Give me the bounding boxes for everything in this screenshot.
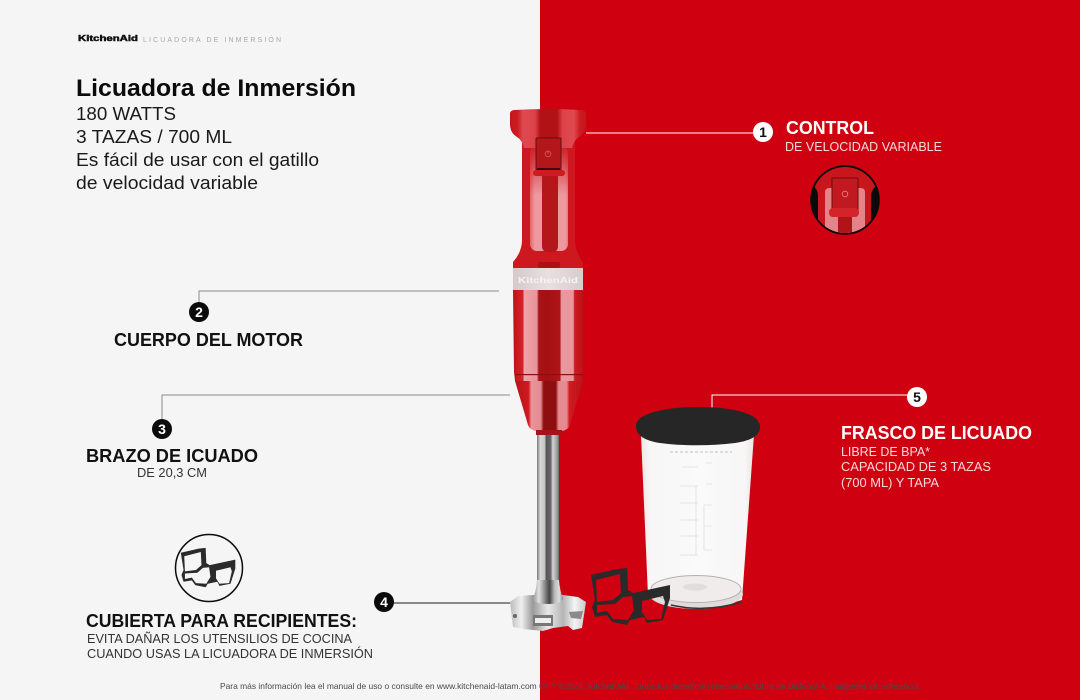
product specifications: de velocidad variable xyxy=(76,173,258,193)
product specifications: Es fácil de usar con el gatillo xyxy=(76,150,319,170)
callout 5: blending jar: LIBRE DE BPA* xyxy=(841,444,930,459)
blender: blade foot xyxy=(510,595,586,631)
blender: trigger bar xyxy=(533,170,565,176)
callout 1: control: 1 xyxy=(759,124,767,140)
callout 4: pan guard: 4 xyxy=(380,594,388,610)
blender: collar xyxy=(536,430,562,435)
callout 5: blending jar: FRASCO DE LICUADO xyxy=(841,423,1032,443)
brand header: KitchenAid xyxy=(78,34,138,43)
callout 1: control: DE VELOCIDAD VARIABLE xyxy=(785,139,942,154)
blender: ring xyxy=(515,374,583,375)
jar: base xyxy=(649,576,743,609)
blender: steel neck flare xyxy=(533,580,563,604)
product specifications: 180 WATTS xyxy=(76,104,176,124)
brand header: LICUADORA DE INMERSIÓN xyxy=(143,35,281,44)
callout 2: motor body: CUERPO DEL MOTOR xyxy=(114,330,303,350)
blender: steel shaft xyxy=(537,432,559,587)
callout 3: blending arm xyxy=(86,395,510,480)
title: Licuadora de Inmersión xyxy=(76,75,356,102)
blender: highlight fade xyxy=(530,146,568,196)
jar: lid xyxy=(636,407,760,445)
product specifications: 3 TAZAS / 700 ML xyxy=(76,127,232,147)
callout 4: pan guard: CUBIERTA PARA RECIPIENTES: xyxy=(86,611,357,631)
immersion blender xyxy=(510,109,586,631)
icon: trigger close-up inset xyxy=(810,166,880,237)
icon: pan guard inset xyxy=(176,534,242,602)
callout 5: blending jar: 5 xyxy=(913,389,921,405)
blender: neck highlight xyxy=(530,146,568,251)
callout 4: pan guard: CUANDO USAS LA LICUADORA DE INMERSIÓN xyxy=(87,646,373,661)
brand header xyxy=(78,34,281,44)
blender: silver band xyxy=(513,268,583,290)
callout 3: blending arm: BRAZO DE ICUADO xyxy=(86,446,258,466)
blender: center stripe xyxy=(542,174,558,252)
callout 1: control: CONTROL xyxy=(786,118,874,138)
callout 3: blending arm: 3 xyxy=(158,421,166,437)
pan guard accessory xyxy=(591,568,670,625)
background: light left panel xyxy=(0,0,540,700)
jar: body xyxy=(641,435,754,606)
callout 5: blending jar: CAPACIDAD DE 3 TAZAS xyxy=(841,459,991,474)
callout 4: pan guard xyxy=(86,592,510,661)
background: red right panel xyxy=(540,0,1080,700)
callout 3: blending arm: DE 20,3 CM xyxy=(137,465,207,480)
blender: handle neck xyxy=(513,135,583,268)
blender: cone xyxy=(515,381,583,431)
product specifications xyxy=(76,104,319,193)
callout 2: motor body: 2 xyxy=(195,304,203,320)
callout 5: blending jar xyxy=(712,387,1032,490)
blender: trigger button xyxy=(536,138,561,170)
blender: top cap xyxy=(510,109,586,148)
callout 2: motor body xyxy=(114,291,499,350)
blender: lower body xyxy=(513,290,583,381)
blender: silver band: KitchenAid xyxy=(518,275,578,285)
callout 5: blending jar: (700 ML) Y TAPA xyxy=(841,475,939,490)
blending jar with lid xyxy=(636,407,760,609)
callout 1: control xyxy=(586,118,942,154)
footer legal note: Para más información lea el manual de uso o consulte en www.kitchenaid-latam.com ©/™ ©2024, KitchenAid. Todos los derechos reservados.*Libre de Bisfenol A. Imágenes de referencia. xyxy=(220,681,921,691)
jar: measurement markings xyxy=(670,452,732,555)
blender: shadow above band xyxy=(538,262,560,268)
callout 4: pan guard: EVITA DAÑAR LOS UTENSILIOS DE COCINA xyxy=(87,631,352,646)
